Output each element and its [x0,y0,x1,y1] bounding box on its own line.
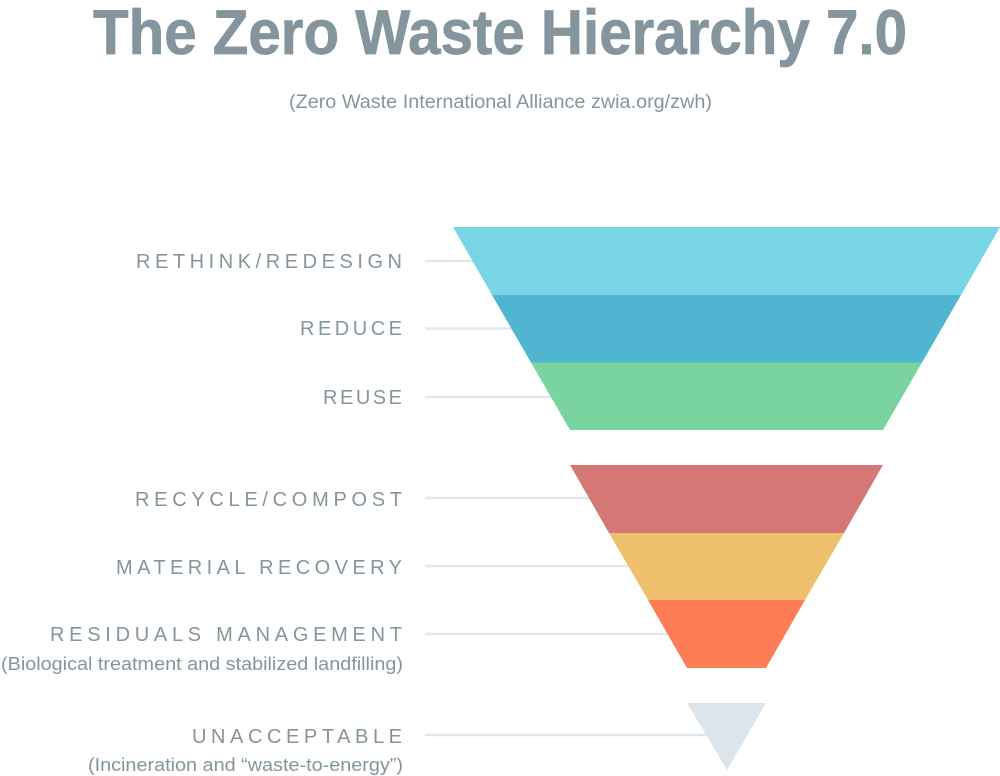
subtitle: (Zero Waste International Alliance zwia.org/zwh) [289,92,712,113]
tier: rethink/redesign [453,227,1000,295]
middle funnel: recovery practices [570,465,883,668]
label: residuals management: RESIDUALS MANAGEMENT [50,624,402,646]
label: recycle/compost: RECYCLE/COMPOST [135,489,402,511]
label: rethink/redesign: RETHINK/REDESIGN [136,251,402,273]
label: reduce: REDUCE [300,318,402,340]
connector lines [425,261,708,735]
tier: recycle/compost [570,465,883,533]
title: The Zero Waste Hierarchy 7.0 [93,0,907,68]
tier: reuse [531,362,922,430]
label: unacceptable: UNACCEPTABLE [192,726,402,748]
label: material recovery: MATERIAL RECOVERY [116,557,402,579]
note: unacceptable: (Incineration and “waste-to-energy”) [88,754,403,775]
tier: unacceptable [687,703,766,770]
tier: reduce [492,295,961,362]
tier: residuals management [648,600,805,668]
label: reuse: REUSE [323,387,402,409]
note: residuals management: (Biological treatment and stabilized landfilling) [1,653,403,674]
tier: material recovery [609,533,844,600]
upper funnel: preferred practices [453,227,1000,430]
